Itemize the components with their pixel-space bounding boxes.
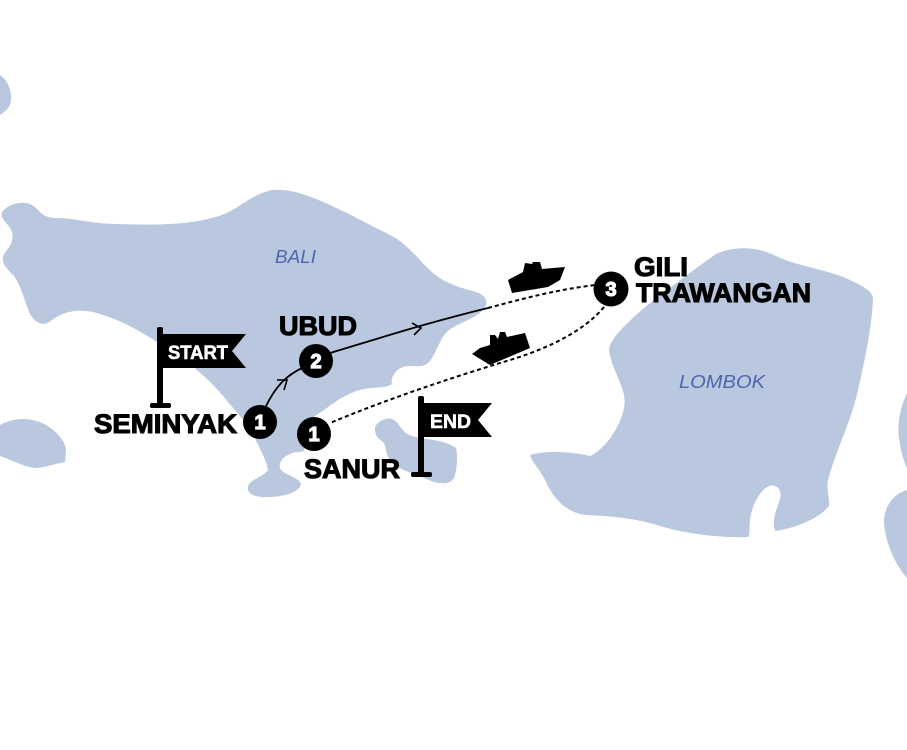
label: LOMBOK: LOMBOK — [679, 372, 766, 392]
stop 3: Gili Trawangan — [594, 252, 811, 308]
island: Java fragment — [0, 419, 66, 468]
stop 1: Sanur — [297, 417, 400, 484]
flag: END — [411, 396, 492, 477]
arrowhead: first leg — [277, 380, 287, 390]
route: ferry to Gili — [488, 285, 596, 308]
route: ferry to Sanur — [330, 307, 604, 423]
icon: upper ferry — [508, 262, 565, 293]
island: top-left fragment — [0, 75, 11, 115]
arrowhead: second leg — [412, 323, 421, 335]
stop 3: Gili Trawangan: GILI — [634, 252, 688, 282]
island: Bali — [2, 190, 486, 497]
stop 3: Gili Trawangan: 3 — [605, 279, 617, 301]
stop 1: Seminyak: SEMINYAK — [94, 409, 238, 439]
label: BALI: BALI — [275, 247, 316, 267]
route: Seminyak to Ubud — [266, 368, 302, 406]
island: Lombok — [530, 248, 873, 537]
island: Nusa Penida — [375, 419, 457, 483]
flag: END: END — [430, 412, 471, 433]
island: right fragments — [884, 393, 907, 578]
stop 2: Ubud — [279, 311, 357, 378]
stop 2: Ubud: UBUD — [279, 311, 357, 341]
flag: START — [150, 327, 246, 408]
stop 1: Sanur: 1 — [308, 424, 320, 446]
stop 3: Gili Trawangan: TRAWANGAN — [636, 278, 811, 308]
flag: START: START — [168, 343, 228, 364]
stop 1: Seminyak: 1 — [254, 412, 266, 434]
route: Ubud to coast — [330, 308, 488, 353]
stop 1: Seminyak — [94, 405, 277, 439]
icon: lower ferry — [472, 332, 530, 365]
stop 1: Sanur: SANUR — [304, 454, 400, 484]
stop 2: Ubud: 2 — [310, 351, 322, 373]
